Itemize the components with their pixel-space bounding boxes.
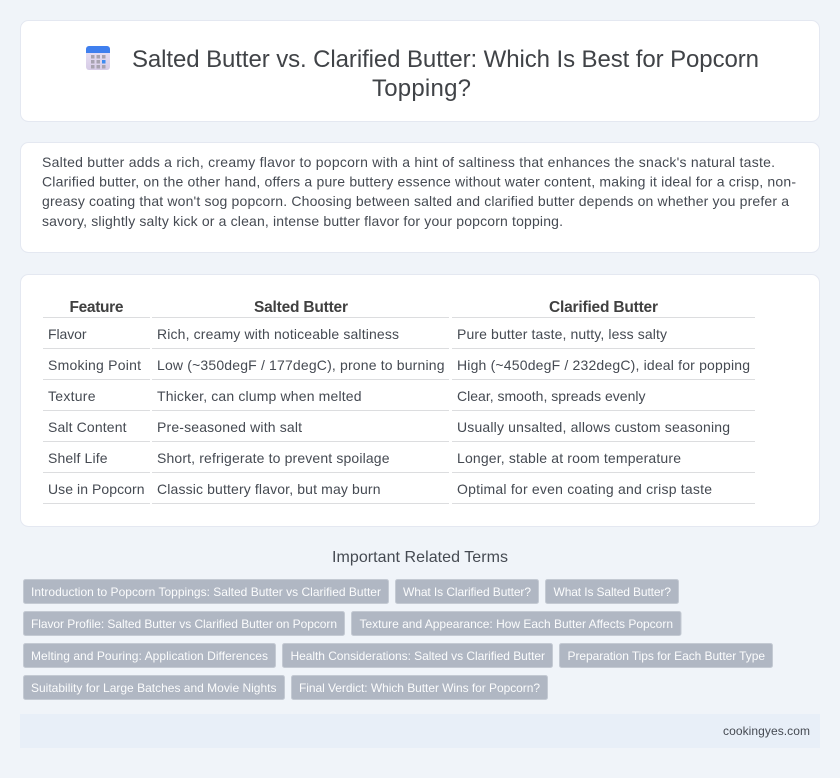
table header: Clarified Butter xyxy=(549,299,658,316)
summary text: savory, slightly salty kick or a clean, intense butter flavor for your popcorn topping. xyxy=(42,213,563,229)
summary text: Clarified butter, on the other hand, offers a pure buttery essence without water content, making it ideal for a crisp, non- xyxy=(42,174,796,190)
panel: summary paragraph xyxy=(20,142,820,252)
row: flavor: Flavor xyxy=(48,326,87,342)
row: smoking point: Smoking Point xyxy=(48,357,141,373)
table header: Salted Butter xyxy=(254,299,348,316)
table header: Feature xyxy=(70,299,124,316)
title xyxy=(132,46,759,102)
row: shelf life: Shelf Life xyxy=(48,450,108,466)
related term tags: Suitability for Large Batches and Movie Nights xyxy=(31,681,276,695)
row: smoking point: High (~450degF / 232degC), ideal for popping xyxy=(457,357,750,373)
row: texture: Thicker, can clump when melted xyxy=(157,388,362,404)
related term tags: What Is Clarified Butter? xyxy=(403,585,531,599)
footer: cookingyes.com xyxy=(723,724,810,738)
related term tags: Introduction to Popcorn Toppings: Salted Butter vs Clarified Butter xyxy=(31,585,381,599)
row: shelf life xyxy=(48,450,681,466)
row: smoking point xyxy=(48,357,750,373)
summary text: greasy coating that won't sog popcorn. Choosing between salted and clarified butter depends on whether you prefer a xyxy=(42,193,789,209)
summary text xyxy=(42,154,796,229)
row: salt content: Salt Content xyxy=(48,419,127,435)
row: use in popcorn: Optimal for even coating and crisp taste xyxy=(457,481,712,497)
related term tags: Final Verdict: Which Butter Wins for Popcorn? xyxy=(299,681,540,695)
row: smoking point: Low (~350degF / 177degC), prone to burning xyxy=(157,357,444,373)
panel: header xyxy=(20,20,820,122)
title: Topping? xyxy=(372,75,471,102)
table header xyxy=(70,299,658,316)
row: salt content: Usually unsalted, allows custom seasoning xyxy=(457,419,730,435)
row: salt content: Pre-seasoned with salt xyxy=(157,419,302,435)
related term tags: What Is Salted Butter? xyxy=(554,585,671,599)
related term tags: Melting and Pouring: Application Differences xyxy=(31,649,268,663)
row: flavor: Rich, creamy with noticeable saltiness xyxy=(157,326,399,342)
row: use in popcorn: Use in Popcorn xyxy=(48,481,144,497)
row: use in popcorn: Classic buttery flavor, but may burn xyxy=(157,481,380,497)
row: use in popcorn xyxy=(48,481,712,497)
related term tags xyxy=(24,580,772,700)
row: salt content xyxy=(48,419,730,435)
footer xyxy=(20,714,820,748)
row: shelf life: Short, refrigerate to prevent spoilage xyxy=(157,450,390,466)
related term tags: Health Considerations: Salted vs Clarified Butter xyxy=(290,649,545,663)
row: texture: Clear, smooth, spreads evenly xyxy=(457,388,646,404)
related term tags: Flavor Profile: Salted Butter vs Clarified Butter on Popcorn xyxy=(31,617,337,631)
summary text: Salted butter adds a rich, creamy flavor to popcorn with a hint of saltiness that enhances the snack's natural taste. xyxy=(42,154,775,170)
row: texture xyxy=(48,388,646,404)
row: texture: Texture xyxy=(48,388,96,404)
related term tags: Texture and Appearance: How Each Butter Affects Popcorn xyxy=(360,617,673,631)
title: Salted Butter vs. Clarified Butter: Which Is Best for Popcorn xyxy=(132,46,759,73)
related term tags: Preparation Tips for Each Butter Type xyxy=(568,649,765,663)
row: flavor: Pure butter taste, nutty, less salty xyxy=(457,326,667,342)
row: flavor xyxy=(48,326,667,342)
row: shelf life: Longer, stable at room temperature xyxy=(457,450,681,466)
panel: comparison table xyxy=(20,274,820,526)
icon: calendar xyxy=(86,46,110,70)
heading: important related terms: Important Related Terms xyxy=(332,549,508,566)
